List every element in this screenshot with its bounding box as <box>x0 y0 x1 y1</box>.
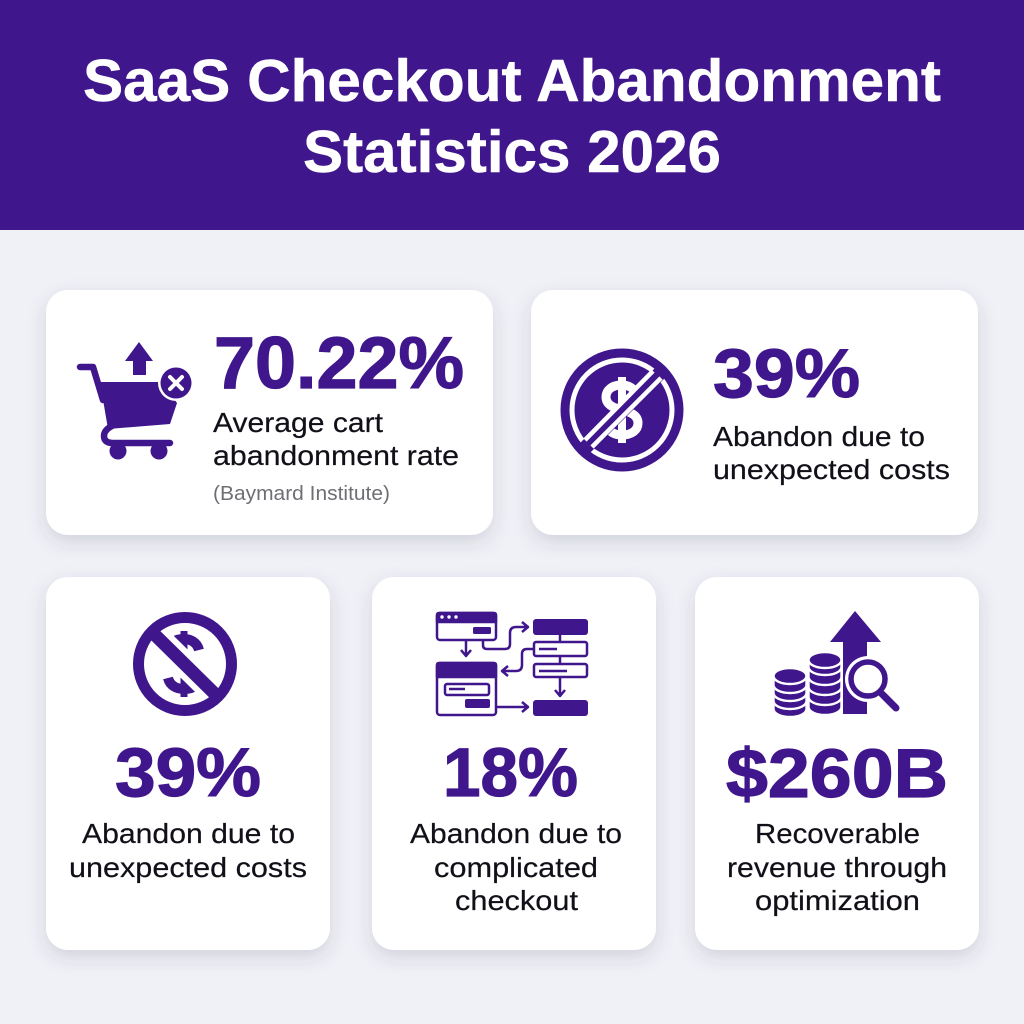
stat: 39%: 39% <box>713 335 860 412</box>
description <box>213 407 459 471</box>
description: Abandon due to <box>713 421 925 452</box>
stat: 39%: 39% <box>115 734 261 811</box>
panel: complicated checkout <box>372 577 656 950</box>
icon: coins, arrow and magnifier <box>774 611 896 717</box>
description: Abandon due to <box>82 818 295 849</box>
icon: crossed-out dollar disc <box>560 348 684 472</box>
description: Average cart <box>213 407 383 438</box>
description: Abandon due to <box>410 818 622 849</box>
panel: unexpected costs (bottom) <box>46 577 330 950</box>
title: Statistics 2026 <box>303 119 721 185</box>
icon: shopping cart <box>80 342 194 460</box>
description: abandonment rate <box>213 440 459 471</box>
description <box>727 818 947 916</box>
title: SaaS Checkout Abandonment <box>83 48 941 114</box>
description: complicated <box>434 852 598 883</box>
header banner <box>0 0 1024 230</box>
panel: unexpected costs (top) <box>531 290 978 535</box>
stat: 18%: 18% <box>443 734 578 811</box>
icon: checkout flow diagram <box>437 613 588 716</box>
description: unexpected costs <box>69 852 307 883</box>
source: (Baymard Institute) <box>213 483 390 505</box>
description <box>69 818 307 883</box>
description <box>410 818 622 916</box>
panel: recoverable revenue <box>695 577 979 950</box>
description <box>713 421 950 485</box>
description: revenue through <box>727 852 947 883</box>
icon: no dollar sign <box>138 618 232 710</box>
title <box>83 48 941 185</box>
stat: 70.22%: 70.22% <box>214 323 464 404</box>
stat: $260B: $260B <box>726 735 948 812</box>
description: unexpected costs <box>713 454 950 485</box>
description: optimization <box>755 885 920 916</box>
panel: cart abandonment <box>46 290 493 535</box>
description: checkout <box>455 885 578 916</box>
description: Recoverable <box>755 818 920 849</box>
